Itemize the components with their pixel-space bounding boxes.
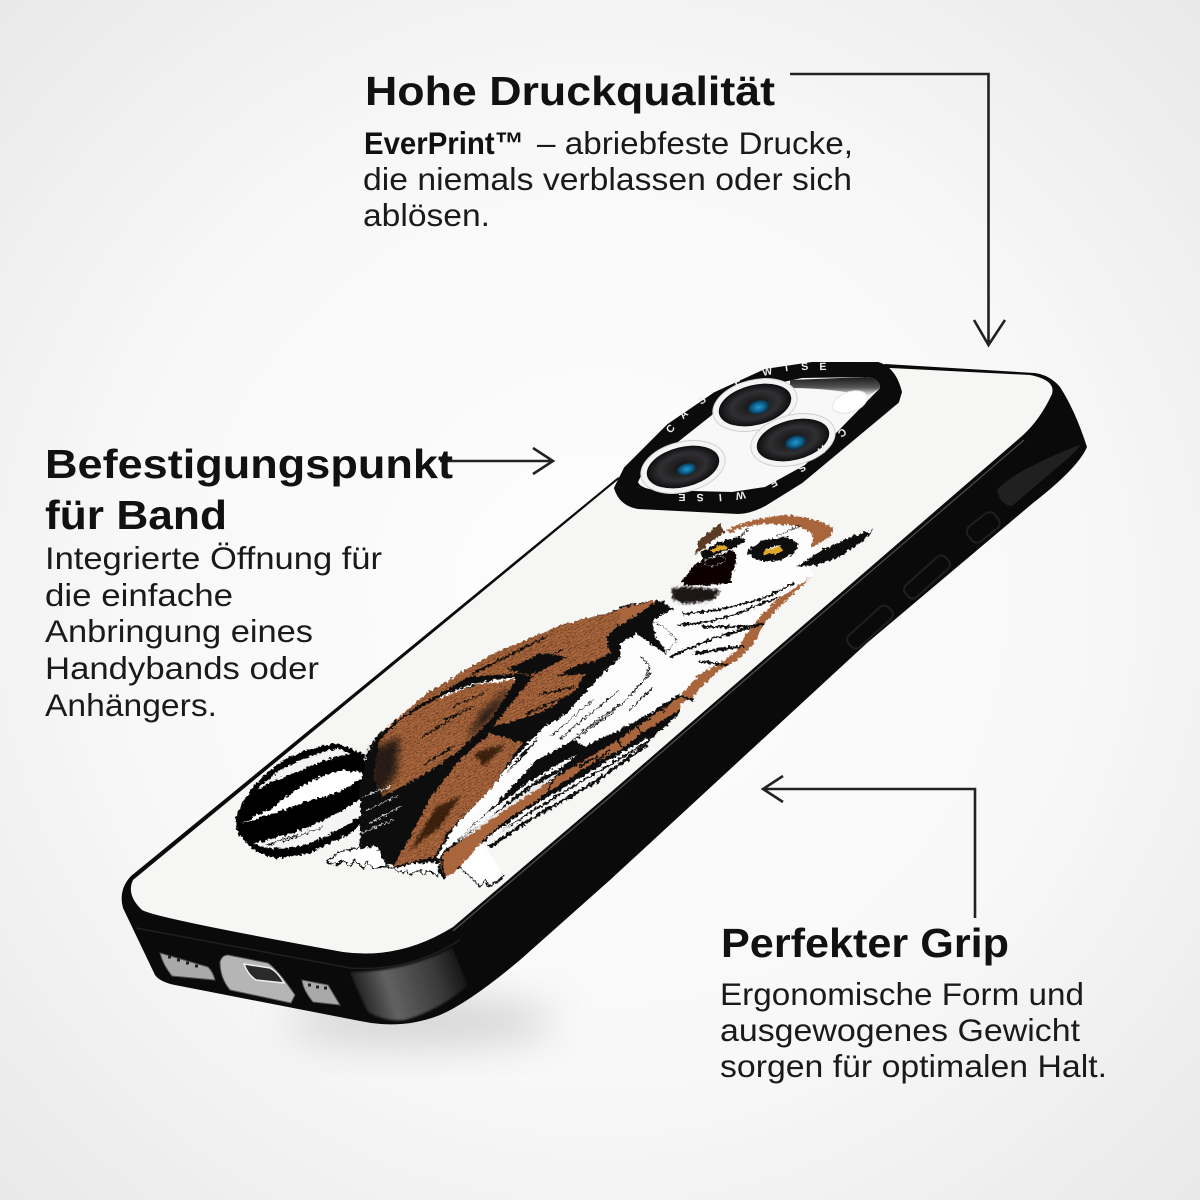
side button: volume up xyxy=(902,553,952,601)
right eye patch xyxy=(748,537,798,562)
side button: volume down xyxy=(845,603,895,651)
thigh hatch xyxy=(370,678,517,797)
white chest xyxy=(440,620,680,857)
thigh highlight xyxy=(440,679,513,697)
neck white xyxy=(620,603,780,710)
heading: Hohe Druckqualität xyxy=(365,68,775,114)
right eye xyxy=(763,545,784,556)
description: sorgen für optimalen Halt. xyxy=(720,1048,1107,1084)
right ear xyxy=(797,530,873,567)
tail stripe middle xyxy=(243,770,367,823)
brand lettering: E xyxy=(732,375,743,389)
chest mark xyxy=(620,657,653,710)
phone with case xyxy=(122,364,1087,1024)
lower leg fur xyxy=(440,697,680,877)
description: die niemals verblassen oder sich xyxy=(363,161,852,197)
bumper lower edge line xyxy=(136,928,460,968)
back plate xyxy=(131,368,1053,954)
lower leg stripes xyxy=(442,703,670,873)
brand lettering: E xyxy=(767,476,779,490)
flank hatch xyxy=(393,733,523,867)
brand lettering: S xyxy=(795,461,808,474)
head and neck xyxy=(620,515,873,710)
description xyxy=(45,540,382,723)
USB-C port xyxy=(220,955,295,1003)
description: Handybands oder xyxy=(45,650,319,686)
heading xyxy=(45,441,453,538)
brand lettering: E xyxy=(819,361,827,373)
shoulder black xyxy=(620,600,710,657)
case bottom corner highlight xyxy=(350,948,468,1020)
case body xyxy=(122,364,1087,1024)
lower neck stripes xyxy=(670,623,763,700)
brand lettering: S xyxy=(696,491,704,503)
brand lettering: W xyxy=(761,365,774,379)
flash xyxy=(830,386,870,418)
left speaker xyxy=(160,953,215,980)
camera island xyxy=(615,361,901,513)
description: Integrierte Öffnung für xyxy=(45,540,382,576)
right speaker holes xyxy=(308,985,327,988)
arrow: grip xyxy=(763,776,975,918)
arrow: band attachment xyxy=(440,448,553,474)
brand lettering: E xyxy=(678,491,686,503)
dark shading on back xyxy=(507,602,657,677)
face xyxy=(683,522,817,610)
description: Anhängers. xyxy=(45,687,217,723)
tail stripe lower xyxy=(253,797,367,848)
brand lettering xyxy=(664,361,849,503)
outer hatched strip xyxy=(490,745,647,847)
brand lettering: A xyxy=(815,442,829,457)
description xyxy=(363,125,853,233)
muzzle xyxy=(682,550,737,585)
text block: Hohe Druckqualität xyxy=(363,68,853,233)
nose highlight xyxy=(704,555,726,567)
left eye xyxy=(711,544,728,553)
plate bevel highlight xyxy=(453,440,1024,931)
body silhouette xyxy=(360,600,680,880)
phone drop shadow xyxy=(285,998,555,1046)
brand lettering: I xyxy=(718,491,722,503)
description: Anbringung eines xyxy=(45,613,313,649)
USB-C opening xyxy=(244,964,284,983)
rear toes xyxy=(392,862,440,877)
flank fur xyxy=(393,733,523,867)
description: ausgewogenes Gewicht xyxy=(720,1012,1080,1048)
lemur illustration xyxy=(235,515,873,888)
arrow: print quality xyxy=(790,74,1005,345)
right speaker xyxy=(302,980,340,1005)
camera ring xyxy=(615,363,901,513)
back fur hatch xyxy=(380,602,657,733)
brand lettering: W xyxy=(735,488,746,502)
lower body hatching xyxy=(360,787,400,833)
thigh black edges xyxy=(423,693,483,765)
heading: Befestigungspunkt xyxy=(45,441,453,487)
lens top xyxy=(707,370,803,440)
whiskers xyxy=(702,525,800,560)
chest black wedge xyxy=(445,740,590,852)
description: die einfache xyxy=(45,577,233,613)
neck stripes xyxy=(678,584,793,625)
side button: action xyxy=(964,509,1003,545)
inner white leg streak xyxy=(455,770,563,843)
text block: Perfekter Grip xyxy=(720,920,1107,1084)
back streaks xyxy=(473,637,573,720)
brand lettering: I xyxy=(784,362,789,374)
description: Ergonomische Form und xyxy=(720,976,1084,1012)
thigh xyxy=(370,678,517,797)
brand lettering: S xyxy=(696,394,709,407)
brown crown xyxy=(727,515,833,548)
flank dark shading xyxy=(410,743,507,850)
left eye patch xyxy=(700,537,745,560)
description xyxy=(720,976,1107,1084)
chest hatch xyxy=(527,683,640,740)
tail xyxy=(235,743,367,858)
flank white edge xyxy=(438,727,547,857)
description: – abriebfeste Drucke, xyxy=(537,125,853,161)
front paw xyxy=(460,843,503,888)
brand lettering: S xyxy=(801,361,809,373)
camera window xyxy=(638,377,880,492)
description: ablösen. xyxy=(363,197,490,233)
lens left xyxy=(635,432,731,502)
description: EverPrint™ xyxy=(364,125,524,161)
lens right xyxy=(745,405,841,475)
window inner shadow xyxy=(790,377,880,396)
white leg line xyxy=(488,740,647,838)
body xyxy=(360,600,680,888)
brand lettering: C xyxy=(664,422,678,436)
left speaker holes xyxy=(168,957,198,966)
chin xyxy=(672,587,720,604)
brand lettering: C xyxy=(835,425,849,440)
back fur xyxy=(380,602,657,733)
heading: für Band xyxy=(45,492,227,538)
left ear xyxy=(695,523,725,553)
thigh lower shading xyxy=(370,687,510,797)
side grip bulge xyxy=(997,445,1080,506)
shoulder brown edge xyxy=(620,600,657,625)
neck brown xyxy=(663,577,812,710)
text block: Befestigungspunkt für Band xyxy=(45,441,453,723)
brand lettering: A xyxy=(677,407,691,422)
tail stripe top xyxy=(257,748,350,790)
rear paw xyxy=(327,845,388,868)
heading: Perfekter Grip xyxy=(721,920,1009,966)
neck tuft xyxy=(652,622,677,652)
